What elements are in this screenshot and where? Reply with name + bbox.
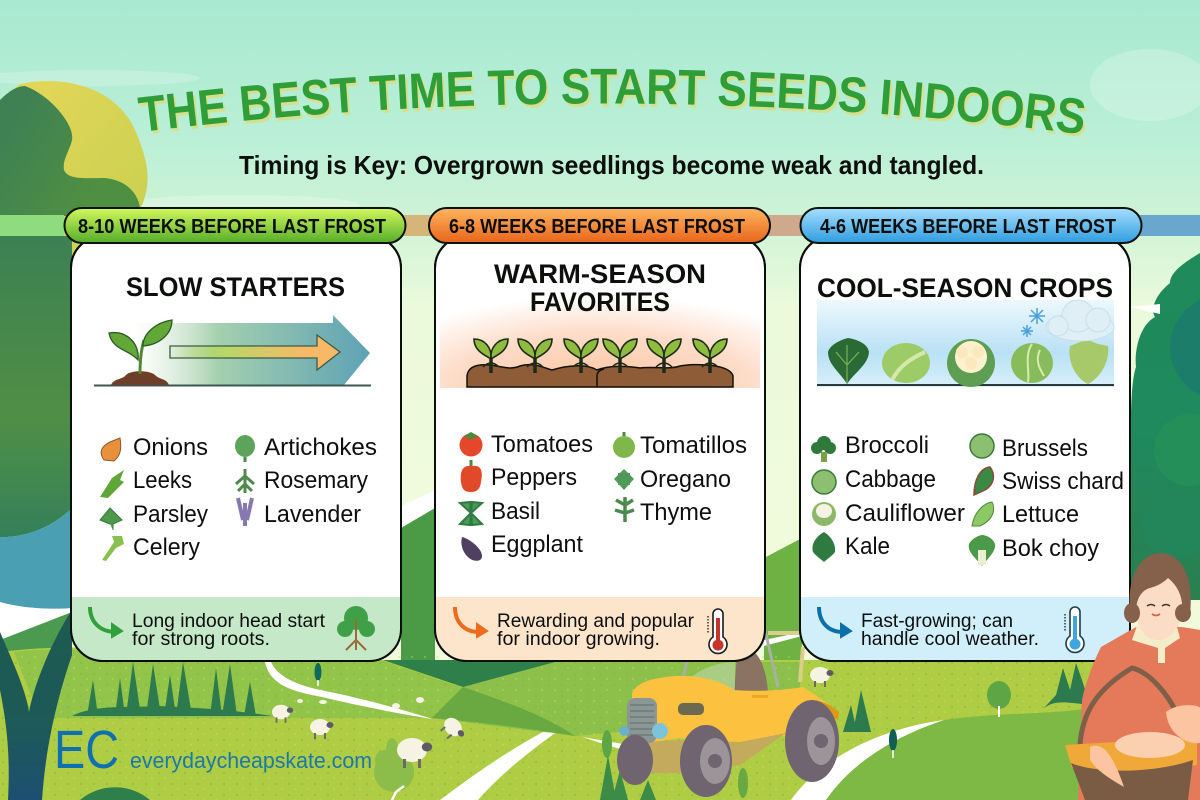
callout: cool-season: Fast-growing; can bbox=[861, 611, 1013, 632]
callout: cool-season bbox=[819, 607, 1084, 652]
callout: slow starters: for strong roots. bbox=[132, 629, 270, 650]
small trees bbox=[80, 663, 1011, 800]
list: cool-season: Lettuce bbox=[1002, 501, 1079, 528]
icons: warm-season crops bbox=[460, 432, 635, 561]
list: cool-season: Swiss chard bbox=[1002, 468, 1124, 495]
heading: slow starters: SLOW STARTERS bbox=[126, 272, 345, 302]
illustration background: warm glow bbox=[440, 270, 760, 388]
woman with basket bbox=[1065, 553, 1200, 800]
icon: red thermometer bbox=[708, 609, 727, 653]
list: warm-season: Peppers bbox=[491, 464, 577, 491]
heading: warm-season favorites bbox=[494, 259, 706, 317]
pill: 6-8 weeks: 6-8 WEEKS BEFORE LAST FROST bbox=[449, 216, 745, 238]
right bushy tree bbox=[1130, 253, 1200, 600]
callout: slow starters bbox=[90, 606, 375, 650]
list: slow starters: Onions bbox=[133, 434, 208, 461]
icons: cool-season crops bbox=[811, 434, 995, 566]
list: cool-season: Cauliflower bbox=[845, 500, 965, 527]
pill: 4-6 weeks: 4-6 WEEKS BEFORE LAST FROST bbox=[820, 216, 1116, 238]
footer band: cool-season bbox=[801, 597, 1129, 660]
list: warm-season: Basil bbox=[491, 498, 540, 525]
list: slow starters: Celery bbox=[133, 534, 200, 561]
list: warm-season: Oregano bbox=[640, 466, 731, 493]
heading: warm-season favorites: FAVORITES bbox=[530, 287, 670, 317]
logo: EC everydaycheapskate.com: EC bbox=[54, 720, 119, 780]
far hills bbox=[0, 490, 802, 800]
logo: EC everydaycheapskate.com bbox=[54, 720, 372, 780]
tractor bbox=[617, 630, 839, 797]
date pills bbox=[64, 208, 1142, 243]
list: cool-season bbox=[845, 432, 1124, 562]
list: slow starters: Rosemary bbox=[264, 467, 368, 494]
title: THE BEST TIME TO START SEEDS INDOORS bbox=[137, 68, 1086, 136]
list: cool-season: Cabbage bbox=[845, 466, 936, 493]
footer band: warm-season bbox=[436, 597, 764, 660]
pill: 8-10 weeks: 8-10 WEEKS BEFORE LAST FROST bbox=[78, 216, 386, 238]
colour timeline band bbox=[0, 215, 1200, 236]
callout: warm-season bbox=[455, 607, 727, 653]
list: warm-season: Tomatillos bbox=[640, 432, 747, 459]
white road at left bbox=[0, 602, 72, 640]
list: cool-season: Bok choy bbox=[1002, 535, 1099, 562]
subtitle: Timing is Key: Overgrown seedlings become weak and tangled. bbox=[239, 150, 984, 180]
list: slow starters: Artichokes bbox=[264, 434, 377, 461]
list: slow starters: Lavender bbox=[264, 501, 361, 528]
illustration background: cool sky bbox=[817, 300, 1114, 387]
callout: warm-season: Rewarding and popular bbox=[497, 611, 695, 632]
illustration: slow growth arrow bbox=[94, 315, 371, 386]
list: slow starters: Parsley bbox=[133, 501, 208, 528]
card: cool-season crops bbox=[800, 236, 1130, 661]
icons: slow starters crops bbox=[100, 435, 255, 561]
callout: warm-season: for indoor growing. bbox=[497, 629, 660, 650]
left tree canopy bbox=[0, 81, 148, 537]
card: warm-season favorites bbox=[435, 236, 765, 661]
list: cool-season: Broccoli bbox=[845, 432, 929, 459]
card: slow starters bbox=[71, 236, 401, 661]
logo: EC everydaycheapskate.com: everydaycheapskate.com bbox=[130, 748, 372, 773]
left tree trunk bbox=[0, 610, 72, 800]
illustration: leafy vegetables under a cloud bbox=[817, 300, 1114, 387]
white roads bbox=[265, 662, 944, 800]
list: warm-season bbox=[491, 431, 747, 558]
illustration: seedlings in soil bbox=[467, 339, 733, 387]
pill: 4-6 weeks bbox=[800, 208, 1142, 243]
callout: slow starters: Long indoor head start bbox=[132, 611, 326, 632]
teal lake behind tree bbox=[0, 508, 72, 609]
heading: cool-season crops: COOL-SEASON CROPS bbox=[817, 273, 1113, 303]
icon: rooted tree bbox=[337, 606, 375, 650]
green meadow foreground bbox=[0, 647, 1200, 800]
list: slow starters bbox=[133, 434, 377, 561]
list: cool-season: Kale bbox=[845, 533, 890, 560]
distant pine trees bbox=[72, 662, 1090, 732]
central right hill bbox=[826, 700, 1200, 800]
heading: warm-season favorites: WARM-SEASON bbox=[494, 259, 706, 289]
grazing sheep bbox=[272, 667, 834, 768]
pill: 8-10 weeks bbox=[64, 208, 406, 243]
list: warm-season: Eggplant bbox=[491, 531, 583, 558]
callout: cool-season: handle cool weather. bbox=[861, 629, 1039, 650]
pill: 6-8 weeks bbox=[429, 208, 770, 243]
clouds bbox=[0, 49, 1200, 215]
list: warm-season: Tomatoes bbox=[491, 431, 593, 458]
list: slow starters: Leeks bbox=[133, 467, 192, 494]
icon: blue thermometer bbox=[1065, 607, 1084, 652]
footer band: slow starters bbox=[72, 597, 400, 660]
list: warm-season: Thyme bbox=[640, 499, 712, 526]
list: cool-season: Brussels bbox=[1002, 435, 1088, 462]
